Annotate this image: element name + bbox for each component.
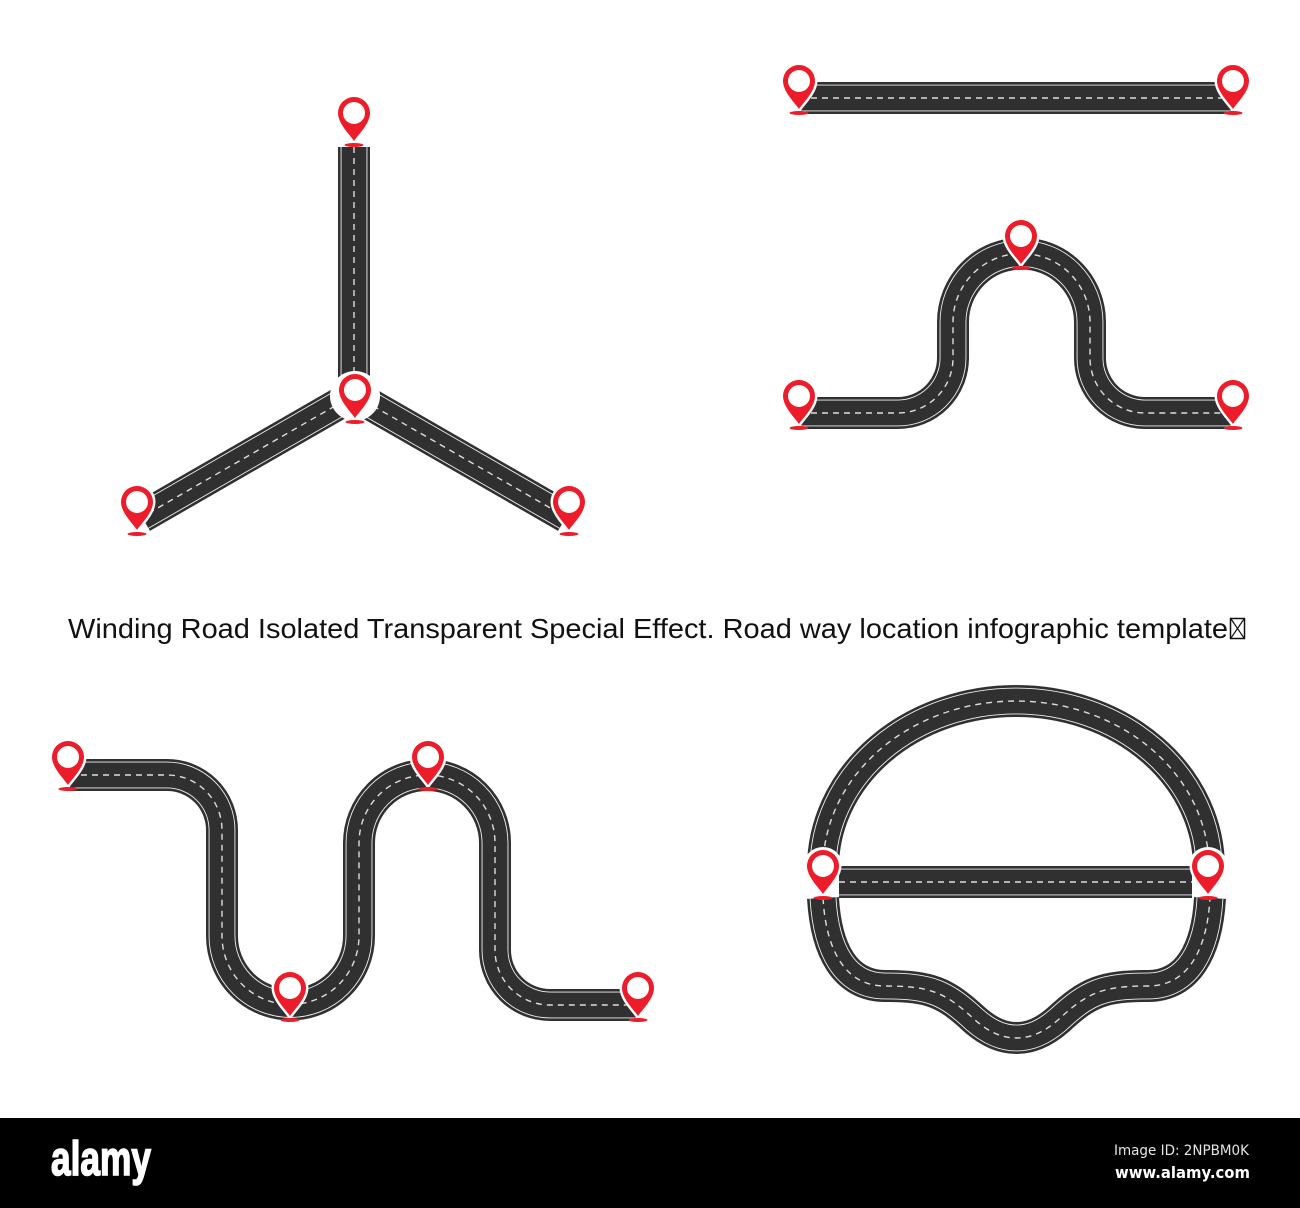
website: www.alamy.com xyxy=(1115,1163,1250,1182)
three-way road junction xyxy=(121,97,585,536)
image id: Image ID: 2NPBM0K xyxy=(1114,1143,1250,1159)
icon: pin start xyxy=(783,65,815,115)
icon: pin start xyxy=(52,741,84,791)
icon: pin end xyxy=(622,972,654,1022)
caption: Winding Road Isolated Transparent Special Effect. Road way location infographic template xyxy=(68,613,1228,644)
icon: pin lower bend xyxy=(274,972,306,1022)
icon: pin end xyxy=(1217,380,1249,430)
icon: pin left xyxy=(121,486,153,536)
road with single hill xyxy=(783,220,1249,430)
icon: pin left xyxy=(807,850,839,900)
loop road with crossing xyxy=(803,701,1228,1038)
icon: pin centre xyxy=(339,374,371,424)
icon: pin start xyxy=(783,380,815,430)
straight road xyxy=(783,65,1249,115)
icon: pin upper bend xyxy=(412,741,444,791)
logo: alamy xyxy=(51,1133,151,1186)
icon: pin right xyxy=(1192,850,1224,900)
icon: pin end xyxy=(1217,65,1249,115)
icon: pin top xyxy=(338,97,370,147)
icon: pin hill top xyxy=(1005,220,1037,270)
footer bar xyxy=(0,1118,1300,1208)
icon: pin right xyxy=(553,486,585,536)
serpentine road xyxy=(52,741,654,1022)
